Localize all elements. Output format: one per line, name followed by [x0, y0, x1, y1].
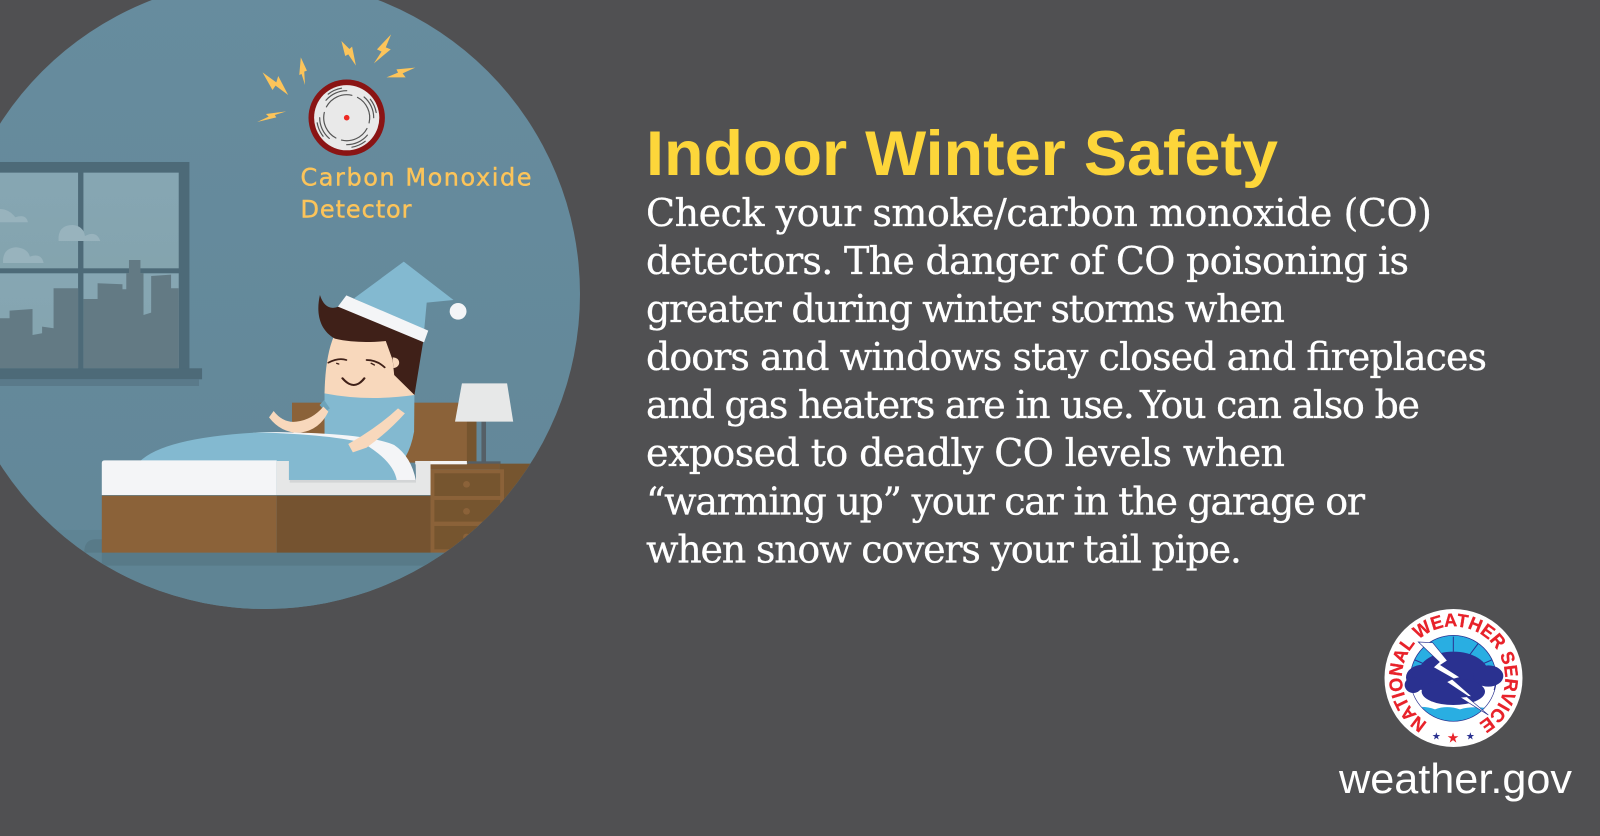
drawers — [434, 473, 500, 549]
nightstand back — [500, 464, 530, 504]
window frame — [0, 162, 189, 369]
water wave — [1410, 707, 1497, 723]
panel: bedroom illustration circle — [0, 0, 608, 630]
detector label: Carbon Monoxide — [300, 164, 532, 192]
left arm — [269, 407, 328, 433]
window sill — [0, 368, 202, 379]
lamp shade — [455, 383, 513, 422]
hat pom — [450, 303, 467, 320]
blanket fold — [253, 432, 416, 481]
blanket shadow — [290, 480, 416, 483]
left sleeve — [320, 400, 330, 412]
hat — [354, 262, 453, 332]
logo text: NATIONAL WEATHER SERVICE — [1388, 614, 1518, 734]
stars: ★ — [1466, 732, 1475, 743]
hat band — [338, 295, 428, 342]
body text: and gas heaters are in use. You can also be — [646, 383, 1420, 427]
title: Indoor Winter Safety — [646, 119, 1278, 189]
body text: when snow covers your tail pipe. — [646, 528, 1242, 572]
detector light — [344, 115, 350, 120]
hair — [318, 295, 426, 395]
body text: exposed to deadly CO levels when — [646, 431, 1285, 475]
person — [269, 262, 467, 457]
clouds — [0, 209, 100, 263]
stars: ★ — [1432, 732, 1441, 743]
face — [325, 337, 421, 398]
white band — [1410, 690, 1497, 708]
right arm — [348, 408, 405, 452]
body text: detectors. The danger of CO poisoning is — [646, 239, 1409, 283]
lamp stem — [481, 422, 486, 462]
detector face — [314, 85, 379, 150]
website label: weather.gov — [1338, 755, 1572, 802]
mattress side — [277, 461, 431, 495]
lamp base — [468, 461, 501, 464]
detector label: Detector — [300, 196, 412, 224]
body text: greater during winter storms when — [646, 287, 1285, 331]
nightstand body — [431, 469, 504, 553]
logo emblem — [1405, 636, 1503, 747]
icon: National Weather Service logo — [1384, 609, 1522, 747]
shirt — [325, 392, 414, 457]
eyes and mouth — [328, 359, 385, 385]
bed shadow — [84, 540, 444, 566]
body text: Check your smoke/carbon monoxide (CO) — [646, 191, 1432, 235]
icon: carbon monoxide detector — [308, 80, 385, 156]
mattress back — [415, 461, 467, 464]
stars — [1432, 731, 1475, 747]
body text: “warming up” your car in the garage or — [646, 480, 1366, 524]
drawer knobs — [463, 481, 470, 540]
sill shadow — [0, 379, 199, 386]
window panes — [0, 173, 179, 368]
cloud — [1405, 652, 1503, 705]
bed base side — [277, 496, 431, 553]
headboard side — [467, 422, 476, 463]
body text: doors and windows stay closed and fireplaces — [646, 335, 1487, 379]
stars: ★ — [1447, 731, 1459, 747]
nightstand — [430, 464, 530, 553]
ear — [393, 357, 399, 368]
detector ring — [308, 80, 385, 156]
wall — [0, 0, 590, 620]
sky sectors — [1411, 636, 1496, 678]
detector alert bolts — [257, 34, 415, 122]
floor — [56, 530, 447, 609]
logo disc — [1384, 609, 1522, 747]
emblem ring — [1411, 636, 1496, 721]
lamp — [455, 383, 513, 464]
blanket — [140, 432, 416, 483]
sky divider lines — [1415, 637, 1492, 665]
mattress front — [102, 460, 277, 495]
city skyline — [0, 260, 179, 368]
bed scene — [56, 262, 530, 609]
window — [0, 162, 202, 386]
headboard — [292, 403, 476, 463]
lightning bolt — [1418, 642, 1488, 715]
bed base front — [102, 496, 277, 553]
nightstand top — [426, 464, 499, 469]
